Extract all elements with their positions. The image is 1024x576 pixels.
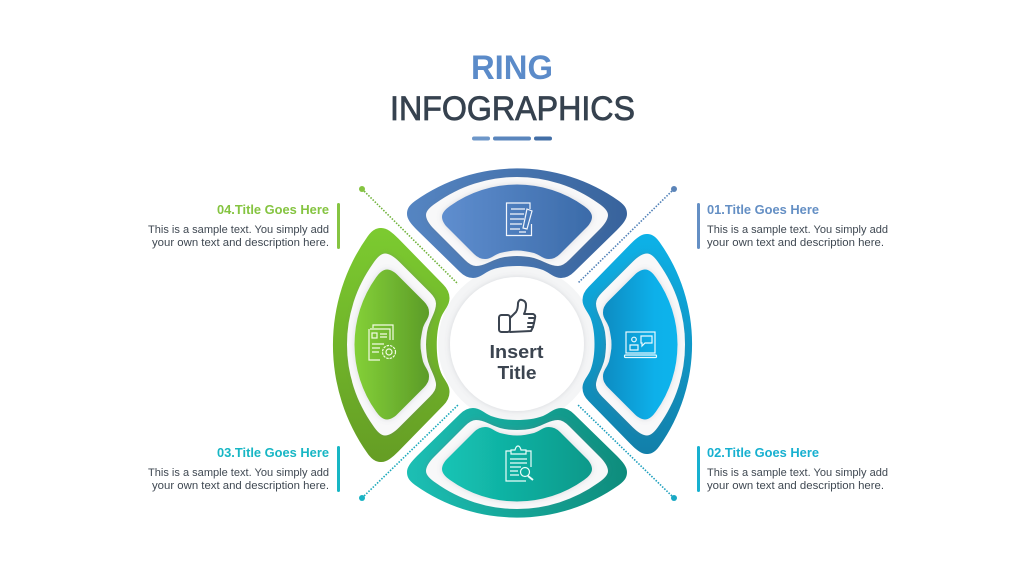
callout 01 — [697, 202, 888, 249]
callout 02 — [697, 445, 888, 492]
center circle — [450, 277, 584, 411]
callout 04 — [148, 202, 340, 249]
callout 01: your own text and description here. — [707, 237, 884, 249]
title: RING: RING — [471, 49, 553, 87]
connector: bottom right — [578, 405, 677, 501]
title: INFOGRAPHICS: INFOGRAPHICS — [390, 90, 635, 128]
callout 03 — [148, 445, 340, 492]
callout 02: This is a sample text. You simply add — [707, 467, 888, 479]
callout 03: This is a sample text. You simply add — [148, 467, 329, 479]
segment: right cyan — [582, 234, 692, 454]
center title: Title — [498, 362, 536, 383]
connector: bottom left — [359, 405, 458, 501]
callout 02: 02.Title Goes Here — [707, 445, 819, 460]
segment: bottom teal — [407, 408, 627, 518]
callout 04: your own text and description here. — [152, 237, 329, 249]
icon: clipboard with magnifier — [506, 446, 533, 481]
icon: thumbs up — [499, 300, 535, 332]
connector: top right — [578, 186, 677, 283]
center title: Insert — [490, 341, 544, 362]
connector: top left — [359, 186, 458, 284]
callout 02: your own text and description here. — [707, 480, 884, 492]
center halo ring — [438, 265, 596, 423]
icon: document and pen — [506, 203, 532, 236]
icon: laptop with person and chat — [624, 332, 656, 358]
icon: documents with gear — [369, 325, 396, 360]
callout 04: 04.Title Goes Here — [217, 202, 329, 217]
title underline dashes — [472, 136, 552, 140]
callout 01: This is a sample text. You simply add — [707, 224, 888, 236]
callout 03: your own text and description here. — [152, 480, 329, 492]
callout 01: 01.Title Goes Here — [707, 202, 819, 217]
segment: left green — [333, 228, 450, 462]
center title — [490, 341, 544, 383]
callout 04: This is a sample text. You simply add — [148, 224, 329, 236]
callout 03: 03.Title Goes Here — [217, 445, 329, 460]
segment: top blue — [407, 168, 627, 278]
